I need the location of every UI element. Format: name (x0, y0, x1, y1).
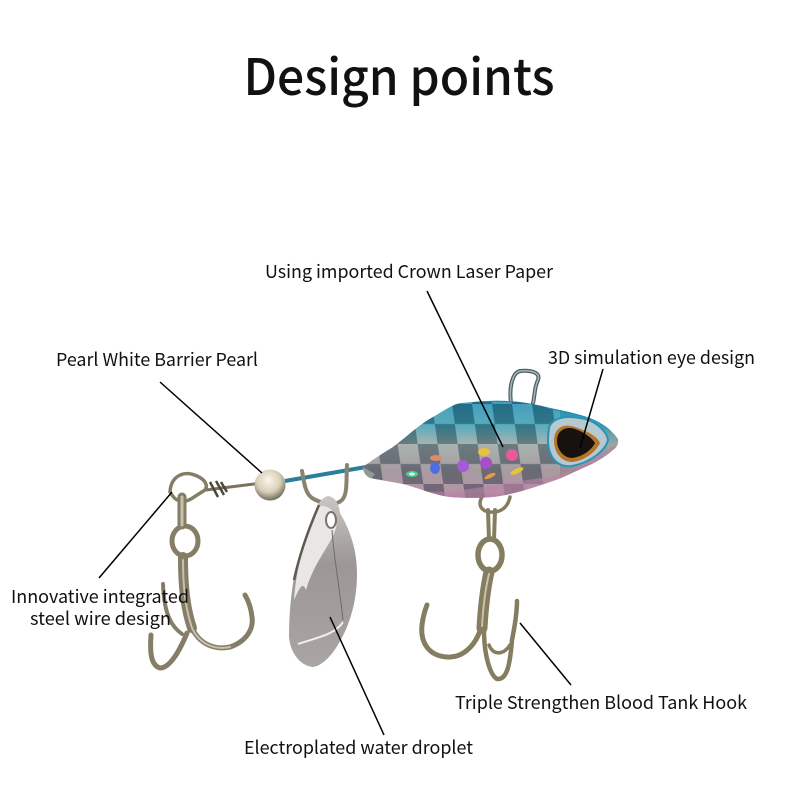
line: water droplet (330, 617, 384, 735)
title: Design points (244, 38, 554, 110)
leader lines (99, 291, 603, 735)
willow spoon blade (289, 496, 357, 667)
lure illustration (151, 371, 625, 679)
left treble hook (151, 474, 252, 668)
label: steel wire: Innovative integrated (11, 583, 189, 609)
blue wire (285, 467, 366, 481)
holographic spots (406, 448, 524, 480)
line: blood tank hook (520, 623, 571, 685)
label: water droplet: Electroplated water droplet (244, 734, 473, 760)
line: eye (580, 369, 603, 448)
label: steel wire (11, 583, 189, 631)
line: steel wire (99, 492, 172, 578)
label: laser paper: Using imported Crown Laser Paper (265, 258, 554, 284)
pearl bead (254, 470, 286, 500)
line: barrier pearl (160, 382, 262, 473)
top line eye (510, 371, 539, 403)
label: blood tank hook: Triple Strengthen Blood Tank Hook (455, 689, 747, 715)
label: steel wire: steel wire design (30, 605, 171, 631)
eye (548, 417, 608, 466)
label: pearl: Pearl White Barrier Pearl (56, 346, 258, 372)
right treble hook (422, 497, 517, 679)
spoon clevis (302, 465, 347, 504)
label: eye: 3D simulation eye design (548, 344, 755, 370)
lure body (363, 400, 618, 498)
twisted wire knot (206, 481, 262, 497)
line: laser paper (427, 291, 503, 447)
